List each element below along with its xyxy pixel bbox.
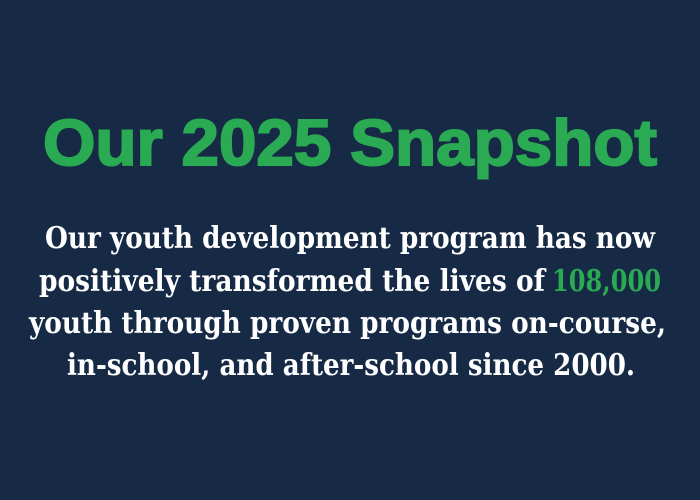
body text block: positively transformed the lives of <box>39 264 547 299</box>
body text block: in-school, and after-school since 2000. <box>67 348 635 383</box>
highlighted number: 108,000 <box>552 264 661 299</box>
body text block <box>28 221 666 383</box>
title: Our 2025 Snapshot <box>43 106 657 179</box>
